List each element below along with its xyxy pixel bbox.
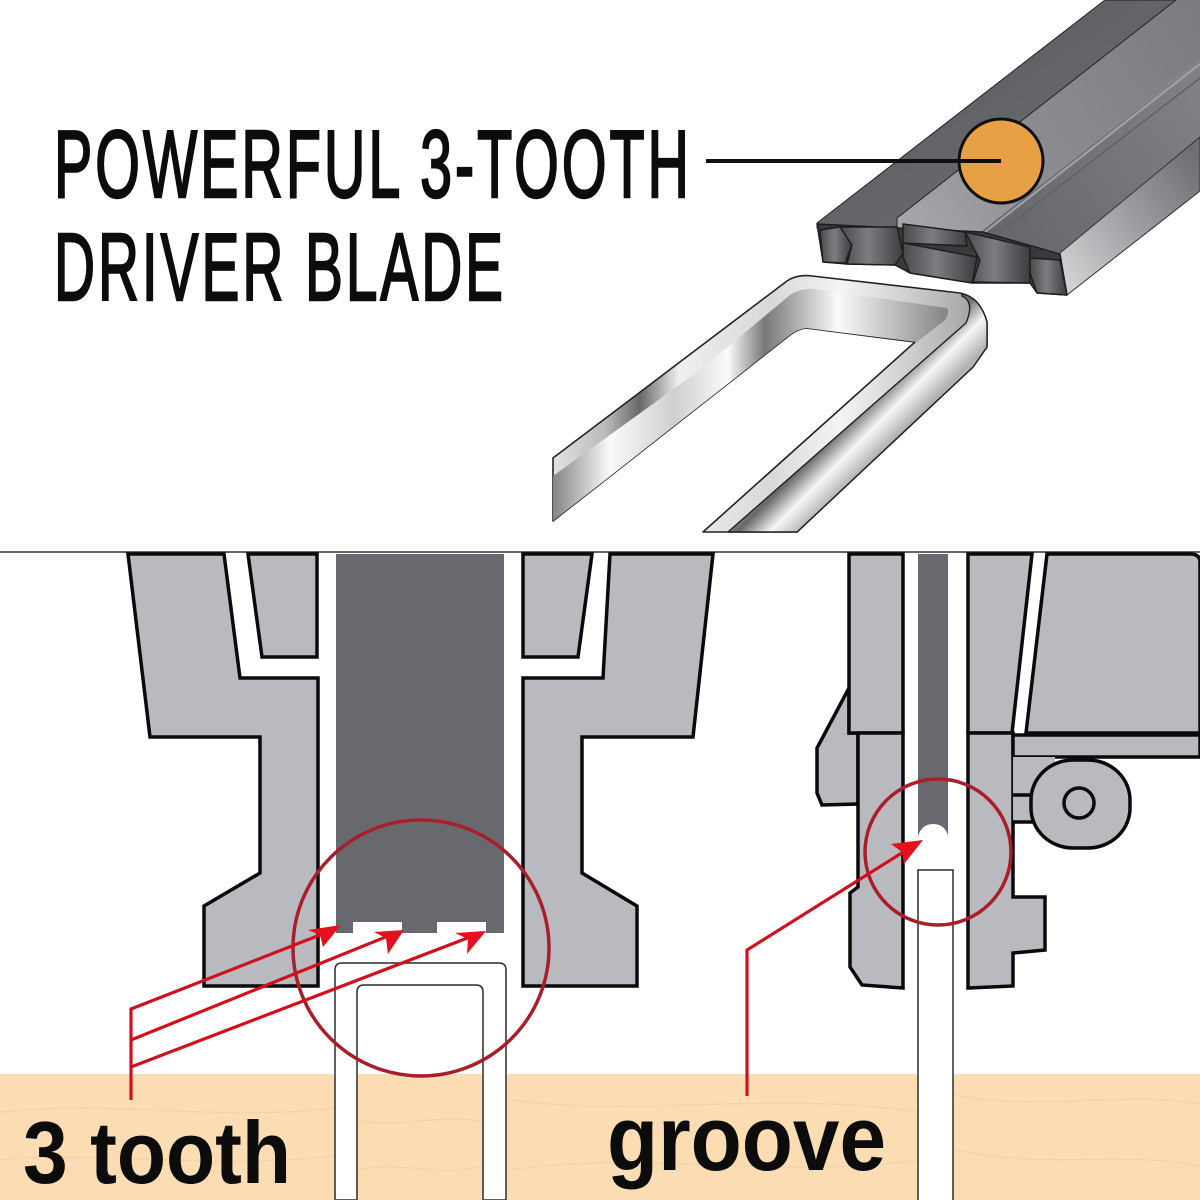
- arrows: 3 tooth: [131, 925, 486, 1100]
- divider line: [0, 551, 1200, 553]
- wing: [817, 688, 858, 805]
- detail circle: groove: [865, 779, 1011, 925]
- steel staple: [553, 276, 987, 532]
- staple side view: [918, 870, 953, 1200]
- heading: powerful 3-tooth driver blade: POWERFUL 3-TOOTH: [54, 111, 692, 218]
- roller connector: [1013, 757, 1055, 822]
- upper right jaw: [968, 554, 1032, 733]
- left nail driver section: [128, 554, 713, 986]
- rail: [1013, 735, 1200, 757]
- arrow: groove: [747, 840, 923, 1096]
- lower left jaw: [850, 733, 903, 988]
- three-tooth driver blade front view: [336, 554, 504, 933]
- callout leader with orange marker: [706, 119, 1043, 203]
- right guide body: [523, 554, 713, 986]
- upper left jaw: [849, 554, 903, 733]
- heading: powerful 3-tooth driver blade: DRIVER BLADE: [54, 214, 506, 321]
- driver blade 3D illustration: [817, 0, 1200, 295]
- blade end face with teeth: [817, 224, 1067, 295]
- label: 3 tooth: 3 tooth: [23, 1103, 291, 1200]
- roller: [1031, 760, 1130, 848]
- label: groove: groove: [607, 1088, 886, 1190]
- groove blade side view: [918, 554, 948, 836]
- detail circle: 3 tooth: [293, 820, 549, 1076]
- right side section: [817, 554, 1200, 988]
- staple front view: [335, 963, 506, 1200]
- lower right jaw: [968, 733, 1045, 988]
- right inner wedge: [523, 554, 592, 657]
- magazine housing: [1026, 554, 1200, 733]
- left inner wedge: [248, 554, 317, 657]
- heading: powerful 3-tooth driver blade: [54, 111, 692, 321]
- roller pin: [1064, 788, 1094, 818]
- left guide body: [128, 554, 318, 986]
- wood surface: [0, 1074, 1200, 1200]
